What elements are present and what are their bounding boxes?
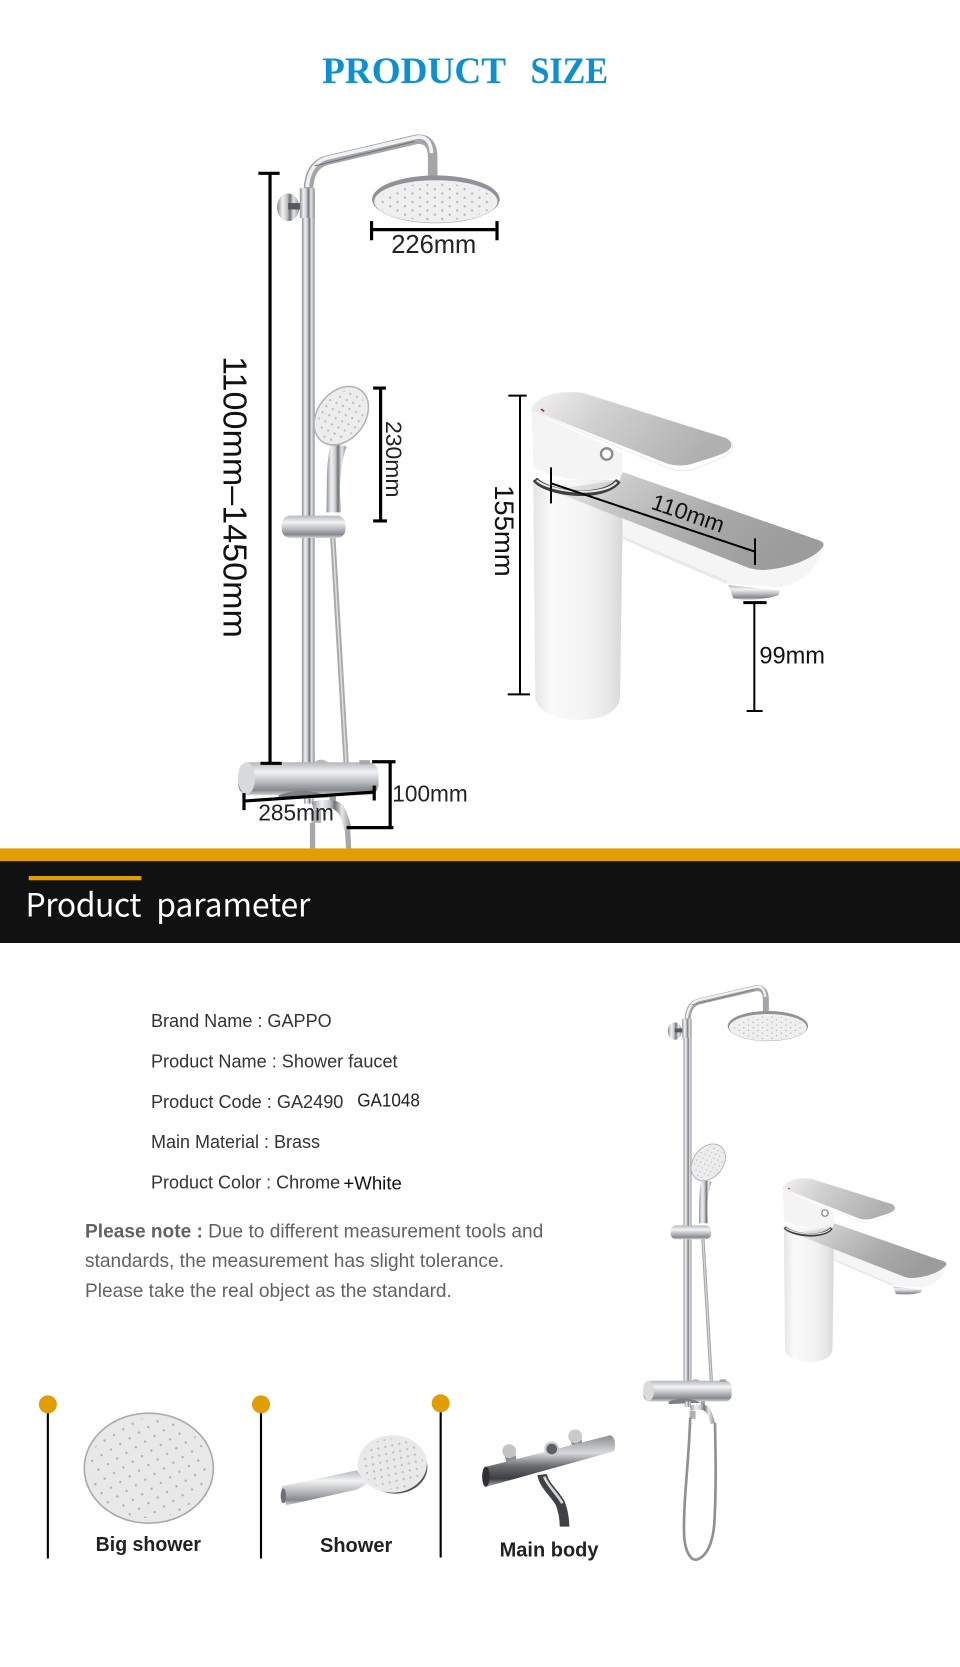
hand shower photo — [281, 1435, 427, 1505]
dimension: faucet height — [508, 396, 530, 695]
parameter list — [151, 1011, 420, 1194]
label: 1100mm-1450mm: 1100mm–1450mm — [216, 356, 253, 638]
title: SIZE — [530, 51, 608, 92]
title — [322, 51, 608, 92]
note text: Please take the real object as the standard. — [85, 1280, 452, 1302]
marker pin — [432, 1394, 450, 1557]
header text: Product — [26, 880, 141, 926]
component: hand shower — [252, 1395, 427, 1559]
parameter list: Product Name : Shower faucet — [151, 1051, 398, 1071]
dimension: head width — [371, 221, 498, 240]
parameter list: Product Color : Chrome — [151, 1173, 340, 1193]
component: main body — [432, 1394, 615, 1561]
label: 285mm: 285mm — [258, 800, 334, 826]
note text: Please note : Due to different measurement tools and — [85, 1220, 543, 1242]
marker pin — [252, 1395, 270, 1559]
dimension: spout length — [551, 467, 755, 565]
header accent line — [29, 876, 141, 880]
thermostat body photo — [482, 1429, 615, 1527]
dimension: overall height — [258, 173, 282, 763]
header text: parameter — [156, 880, 311, 926]
dimension: spout clearance — [743, 602, 767, 712]
caption: Big shower — [96, 1534, 201, 1556]
caption: Main body — [500, 1539, 599, 1561]
header black band — [0, 861, 960, 943]
marker pin — [39, 1395, 57, 1559]
dimension: body width — [244, 786, 374, 810]
section header band — [0, 848, 960, 943]
shower system photo — [238, 137, 500, 851]
header text — [26, 880, 311, 926]
parameter list: +White — [343, 1174, 402, 1194]
shower system with dimensions — [216, 137, 500, 851]
parameter list: Product Code : GA2490 — [151, 1092, 343, 1112]
shower plate — [83, 1412, 214, 1524]
label: 155mm: 155mm — [489, 485, 519, 577]
parameter list: GA1048 — [357, 1091, 420, 1111]
header gold stripe — [0, 848, 960, 861]
parameter list: Brand Name : GAPPO — [151, 1011, 332, 1031]
note text — [85, 1220, 543, 1302]
basin faucet photo — [532, 392, 824, 720]
note text: standards, the measurement has slight tolerance. — [85, 1250, 504, 1272]
label: 226mm: 226mm — [391, 231, 476, 259]
label: 110mm: 110mm — [648, 488, 728, 538]
label: 99mm: 99mm — [759, 643, 825, 669]
title: PRODUCT — [322, 51, 506, 92]
basin faucet with dimensions — [489, 392, 825, 720]
component: big shower — [39, 1395, 214, 1559]
dimension: body height — [347, 761, 395, 828]
dimension: hand shower — [373, 388, 387, 521]
basin faucet photo, right — [783, 1179, 947, 1362]
caption: Shower — [320, 1535, 392, 1557]
label: 230mm: 230mm — [381, 421, 406, 498]
parameter list: Main Material : Brass — [151, 1132, 320, 1152]
label: 100mm: 100mm — [392, 781, 468, 807]
shower system photo, right — [643, 987, 808, 1560]
